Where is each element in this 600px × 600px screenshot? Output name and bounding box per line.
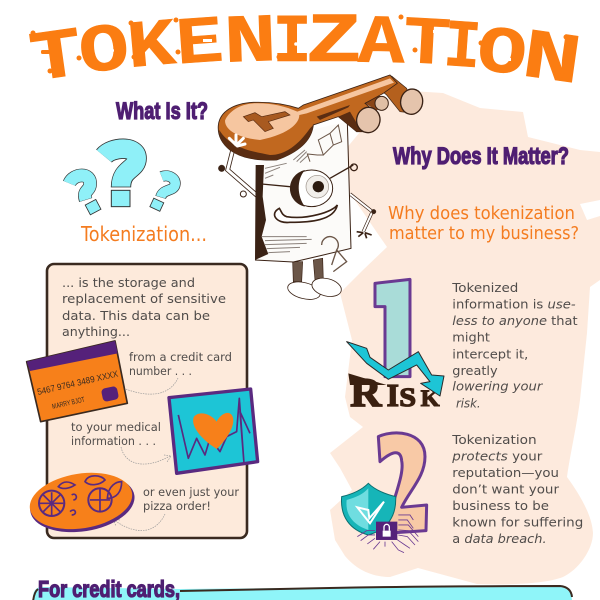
credit card caption: from a credit card [129,350,232,364]
pizza caption: or even just your [143,485,239,499]
text: risk: information is use- [452,296,576,311]
icon: credit card: MARRY BJOT [51,395,86,411]
title: O [75,12,133,93]
icon: pizza [26,466,139,539]
intro text: replacement of sensitive [62,291,226,306]
title [25,2,586,104]
number 1 with risk: K [421,386,440,412]
text: reputation: business to be [452,498,549,513]
intro text: ... is the storage and [62,275,195,290]
robot arms and legs [218,145,376,302]
background blob: why it matters [330,90,600,584]
title: I [441,9,483,88]
subheading: why tokenization matters: matter to my business? [389,223,579,244]
title: N [517,17,586,104]
number 1 with risk: I [387,378,399,413]
text: risk: greatly [452,363,498,378]
icon: credit card: 5467 9764 3489 XXXX [36,369,119,397]
subheading: tokenization: Tokenization... [80,222,207,246]
arrow: order to pizza [113,514,165,531]
title: N [223,3,278,83]
text: reputation: don’t want your [452,482,560,497]
medical caption: to your medical [71,420,161,434]
text: reputation: a data breach. [452,531,547,546]
key teeth [360,76,425,116]
icon: shield [341,483,396,535]
text: risk: might [452,330,490,345]
title: Z [306,2,362,82]
pizza caption [143,485,239,513]
text: reputation: protects your [451,449,543,464]
icon: circuit lock [357,515,418,553]
text: reputation: Tokenization [451,432,537,447]
title: A [357,5,406,84]
robot smile [275,205,337,222]
subheading: why tokenization matters: Why does tokenization [388,203,575,224]
title: T [401,7,453,85]
intro text: anything... [62,324,130,339]
panel: what is it [47,264,247,538]
icon: credit card [27,341,127,422]
intro text [62,275,226,339]
heading: what is it: What Is It? [116,98,208,125]
medical caption: information . . . [71,434,156,448]
arrow: number to card [118,378,178,394]
robot eye [262,164,357,207]
title: K [124,8,179,88]
robot small key [322,237,347,272]
body shading [255,122,351,262]
panel: credit cards [33,586,572,600]
credit card caption: number . . . [129,364,192,378]
intro text: data. This data can be [62,308,210,323]
icon: question marks [69,149,175,215]
medical caption [71,420,161,448]
text: risk: less to anyone that [452,313,578,328]
title: T [25,15,88,102]
text: risk: lowering your [452,379,543,394]
credit card caption [129,350,232,378]
text: reputation: reputation—you [452,465,559,480]
number 1 with risk: R [350,370,383,416]
robot body [255,122,351,262]
robot hand [229,135,245,146]
arrow: medical to heart [121,447,171,464]
subheading: why tokenization matters [388,203,579,244]
text: risk: intercept it, [452,346,528,361]
pizza caption: pizza order! [143,499,211,513]
text: reputation: known for suffering [452,515,583,530]
icon: medical heart monitor [169,389,258,473]
number 2 with shield [341,433,427,553]
text: reputation [451,432,583,546]
text: risk: Tokenized [451,280,518,295]
title: I [273,6,311,83]
illustration: key robot [218,75,425,302]
text: risk [451,280,578,410]
title: E [173,6,226,85]
number 1 with risk [347,279,444,416]
key head and shaft [218,75,397,160]
title: O [473,16,530,95]
text: risk: risk. [456,395,481,410]
number 1 with risk: S [399,384,416,412]
